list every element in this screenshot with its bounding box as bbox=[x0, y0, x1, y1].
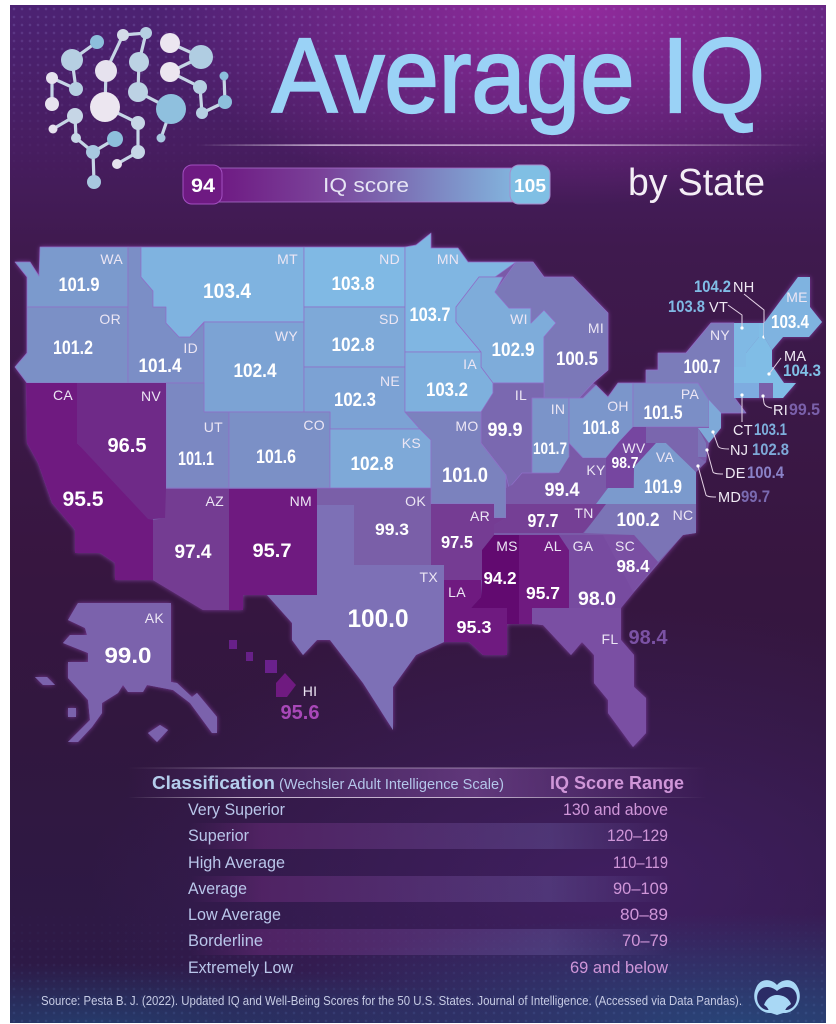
state: Connecticut with callout: CT bbox=[733, 423, 753, 439]
state: Virginia: 101.9 bbox=[644, 477, 682, 498]
state: Indiana: IN bbox=[551, 401, 565, 417]
state: North Dakota: 103.8 bbox=[332, 274, 374, 295]
state: Maine bbox=[764, 277, 822, 350]
state: Nevada: NV bbox=[141, 388, 161, 404]
state: Arizona bbox=[153, 489, 229, 610]
table header bbox=[128, 768, 707, 798]
state: Mississippi bbox=[471, 535, 519, 624]
state: Oregon: 101.2 bbox=[53, 338, 93, 359]
state: South Dakota: 102.8 bbox=[332, 335, 374, 356]
state: Hawaii bbox=[229, 640, 320, 724]
state: Ohio: OH bbox=[607, 398, 629, 414]
row: Superior bbox=[188, 827, 668, 845]
state: New Mexico: NM bbox=[290, 493, 312, 509]
icon: molecular brain logo bbox=[45, 27, 232, 189]
row: Very Superior: 130 and above bbox=[563, 801, 668, 819]
state: Florida: FL bbox=[602, 631, 618, 647]
state: Nebraska: NE bbox=[380, 373, 400, 389]
legend minimum box: 94 bbox=[191, 176, 215, 197]
legend label: IQ score bbox=[323, 175, 409, 197]
state: New Jersey with callout bbox=[698, 400, 789, 459]
state: Missouri bbox=[405, 412, 506, 518]
state: Kentucky: KY bbox=[586, 462, 606, 478]
state: Nevada bbox=[77, 383, 166, 520]
state: Tennessee: TN bbox=[574, 505, 594, 521]
state: Indiana: 101.7 bbox=[533, 439, 567, 458]
state: Minnesota: 103.7 bbox=[410, 305, 450, 326]
state: Maryland with callout bbox=[646, 428, 770, 506]
state: Louisiana: 95.3 bbox=[456, 617, 492, 637]
state: Florida bbox=[532, 608, 668, 747]
state: Utah bbox=[166, 383, 229, 488]
state: California bbox=[26, 383, 153, 580]
state: Montana: MT bbox=[277, 251, 298, 267]
state: Massachusetts with callout bbox=[734, 349, 821, 398]
state: Alabama: 95.7 bbox=[526, 583, 560, 603]
state: Washington: 101.9 bbox=[58, 275, 100, 296]
state: Kansas bbox=[330, 429, 431, 488]
state: New Jersey with callout: 102.8 bbox=[752, 440, 789, 459]
state: Idaho bbox=[128, 247, 204, 383]
row: Extremely Low: Extremely Low bbox=[188, 959, 293, 977]
state: Tennessee bbox=[493, 504, 608, 533]
state: North Dakota bbox=[304, 247, 405, 307]
row: Borderline bbox=[188, 932, 668, 950]
state: Delaware with callout: 100.4 bbox=[747, 463, 784, 482]
legend minimum box bbox=[183, 165, 222, 204]
state: Arizona: AZ bbox=[206, 493, 224, 509]
state: Idaho: ID bbox=[183, 340, 198, 356]
state: Massachusetts with callout: 104.3 bbox=[783, 361, 821, 380]
row: Average bbox=[188, 880, 668, 898]
state: Missouri: MO bbox=[455, 418, 479, 434]
state: Massachusetts with callout: MA bbox=[784, 349, 806, 365]
row: Borderline: Borderline bbox=[188, 932, 263, 950]
state: Maine: ME bbox=[786, 289, 808, 305]
row: Low Average: 80–89 bbox=[620, 906, 668, 924]
state: Ohio: 101.8 bbox=[582, 418, 620, 439]
state: New York bbox=[646, 323, 746, 413]
state: Texas bbox=[267, 505, 444, 730]
state: Hawaii: HI bbox=[303, 683, 317, 699]
state: South Dakota bbox=[304, 307, 405, 367]
state: Pennsylvania: 101.5 bbox=[644, 403, 683, 424]
state: Virginia bbox=[596, 443, 696, 504]
row: Very Superior bbox=[188, 801, 668, 819]
state: Minnesota bbox=[405, 233, 516, 352]
state: Oklahoma: OK bbox=[405, 493, 426, 509]
state: Wyoming bbox=[204, 322, 304, 412]
state: Wisconsin: WI bbox=[510, 311, 528, 327]
choropleth map of US states bbox=[15, 233, 822, 747]
state: Arkansas: 97.5 bbox=[441, 532, 473, 552]
state: Kansas: KS bbox=[402, 435, 421, 451]
state: Maine: 103.4 bbox=[771, 312, 809, 332]
state: Florida: 98.4 bbox=[628, 627, 668, 649]
state: Missouri: 101.0 bbox=[442, 464, 488, 487]
state: Kentucky: 99.4 bbox=[544, 480, 580, 501]
state: Arkansas bbox=[431, 504, 506, 580]
state: Wisconsin bbox=[456, 277, 556, 383]
state: Illinois bbox=[481, 383, 544, 488]
state: Vermont with callout: 103.8 bbox=[668, 297, 705, 316]
state: Alabama: AL bbox=[544, 538, 562, 554]
state: South Carolina bbox=[603, 535, 658, 592]
state: Oregon: OR bbox=[99, 311, 121, 327]
state: South Carolina: 98.4 bbox=[616, 556, 650, 576]
state: Kentucky bbox=[506, 457, 608, 504]
state: New Hampshire with callout: NH bbox=[733, 280, 755, 296]
state: Michigan: 100.5 bbox=[556, 349, 598, 370]
state: Alabama bbox=[519, 535, 569, 624]
state: Tennessee: 97.7 bbox=[528, 511, 558, 531]
state: Nebraska: 102.3 bbox=[334, 390, 376, 411]
table header: (Wechsler Adult Intelligence Scale) bbox=[279, 777, 504, 793]
state: Wyoming: WY bbox=[275, 328, 298, 344]
state: Alaska: AK bbox=[145, 610, 164, 626]
state: Nebraska bbox=[304, 367, 420, 429]
row: Extremely Low: 69 and below bbox=[570, 959, 668, 977]
state: Georgia: GA bbox=[573, 538, 594, 554]
state: Indiana bbox=[532, 398, 569, 473]
state: Virginia: VA bbox=[656, 449, 674, 465]
state: West Virginia: 98.7 bbox=[612, 455, 638, 472]
state: Utah: UT bbox=[204, 419, 223, 435]
state: Oregon bbox=[15, 307, 128, 383]
state: Utah: 101.1 bbox=[178, 449, 214, 470]
row: Superior: 120–129 bbox=[607, 827, 668, 845]
state: Montana: 103.4 bbox=[203, 280, 251, 303]
state: Rhode Island with callout: 99.5 bbox=[789, 400, 820, 419]
row: Average: Average bbox=[188, 880, 247, 898]
state: Rhode Island with callout bbox=[759, 383, 820, 419]
state: Colorado bbox=[229, 412, 330, 488]
state: Wyoming: 102.4 bbox=[234, 361, 277, 382]
state: Minnesota: MN bbox=[437, 251, 459, 267]
title: Average IQ bbox=[272, 17, 765, 135]
state: Nevada: 96.5 bbox=[108, 435, 146, 457]
state: Michigan: MI bbox=[588, 320, 604, 336]
state: North Carolina: 100.2 bbox=[616, 510, 660, 531]
state: Georgia: 98.0 bbox=[578, 589, 616, 610]
state: Illinois: 99.9 bbox=[488, 420, 522, 441]
state: North Dakota: ND bbox=[379, 251, 400, 267]
icon: publisher logo bbox=[754, 980, 800, 1015]
state: Alaska bbox=[35, 603, 217, 742]
state: West Virginia: WV bbox=[622, 440, 646, 456]
state: South Dakota: SD bbox=[379, 311, 399, 327]
state: Arizona: 97.4 bbox=[174, 542, 212, 563]
state: Alaska: 99.0 bbox=[104, 643, 152, 668]
state: West Virginia bbox=[606, 427, 656, 488]
state: Iowa bbox=[405, 352, 493, 412]
state: Washington bbox=[15, 247, 128, 307]
state: New Hampshire with callout bbox=[694, 277, 772, 367]
state: Ohio bbox=[569, 383, 633, 458]
state: Colorado: 101.6 bbox=[256, 447, 296, 468]
state: North Carolina: NC bbox=[673, 507, 693, 523]
state: Wisconsin: 102.9 bbox=[492, 340, 534, 361]
state: Delaware with callout bbox=[698, 428, 784, 482]
state: Connecticut with callout bbox=[733, 383, 787, 439]
state: Pennsylvania bbox=[633, 383, 709, 427]
row: Very Superior: Very Superior bbox=[188, 801, 285, 819]
state: Connecticut with callout: 103.1 bbox=[754, 420, 787, 439]
state: Illinois: IL bbox=[515, 387, 527, 403]
subtitle: by State bbox=[628, 162, 765, 204]
state: Georgia bbox=[559, 535, 634, 610]
row: Low Average: Low Average bbox=[188, 906, 281, 924]
row: Average: 90–109 bbox=[613, 880, 668, 898]
state: Vermont with callout: VT bbox=[709, 300, 728, 316]
state: Oklahoma bbox=[317, 489, 431, 565]
state: Mississippi: MS bbox=[496, 538, 518, 554]
state: Iowa: IA bbox=[463, 356, 477, 372]
state: New Mexico: 95.7 bbox=[252, 541, 292, 562]
state: Oklahoma: 99.3 bbox=[375, 520, 409, 539]
legend maximum box bbox=[510, 165, 550, 204]
state: Pennsylvania: PA bbox=[681, 386, 699, 402]
state: New Mexico bbox=[229, 489, 317, 610]
state: Iowa: 103.2 bbox=[426, 380, 468, 401]
state: New Hampshire with callout: 104.2 bbox=[694, 277, 731, 296]
state: Maryland with callout: MD bbox=[718, 490, 741, 506]
state: Kansas: 102.8 bbox=[350, 454, 394, 475]
state: New York: 100.7 bbox=[684, 357, 720, 378]
table header: IQ Score Range bbox=[550, 773, 684, 793]
state: Maryland with callout: 99.7 bbox=[741, 487, 770, 506]
state: Louisiana bbox=[444, 580, 507, 655]
state: Texas: 100.0 bbox=[348, 605, 408, 633]
state: Texas: TX bbox=[420, 569, 438, 585]
row: Extremely Low bbox=[188, 959, 668, 977]
row: High Average bbox=[188, 854, 668, 872]
state: North Carolina bbox=[584, 504, 696, 562]
state: Arkansas: AR bbox=[470, 508, 490, 524]
state: Delaware with callout: DE bbox=[725, 466, 746, 482]
state: Michigan bbox=[495, 262, 608, 398]
row: High Average: High Average bbox=[188, 854, 285, 872]
state: Louisiana: LA bbox=[448, 584, 466, 600]
row: High Average: 110–119 bbox=[613, 854, 668, 872]
row: Borderline: 70–79 bbox=[622, 932, 668, 950]
legend: IQ score colour scale bbox=[183, 165, 550, 204]
state: Hawaii: 95.6 bbox=[280, 702, 320, 724]
state: New York: NY bbox=[710, 327, 730, 343]
state: New Jersey with callout: NJ bbox=[730, 443, 748, 459]
row: Superior: Superior bbox=[188, 827, 249, 845]
row: Low Average bbox=[188, 906, 668, 924]
state: Washington: WA bbox=[100, 251, 123, 267]
classification table bbox=[128, 768, 707, 977]
state: South Carolina: SC bbox=[615, 538, 635, 554]
table header: Classification bbox=[152, 773, 275, 793]
state: California: CA bbox=[53, 387, 73, 403]
state: California: 95.5 bbox=[62, 488, 104, 511]
state: Montana bbox=[141, 247, 304, 337]
state: Colorado: CO bbox=[303, 417, 325, 433]
state: Idaho: 101.4 bbox=[138, 356, 182, 377]
state: Vermont with callout bbox=[668, 297, 759, 367]
source note: Source: Pesta B. J. (2022). Updated IQ and Well-Being Scores for the 50 U.S. States. Journal of Intelligence. (Accessed via Data Pandas). bbox=[41, 994, 742, 1008]
state: Mississippi: 94.2 bbox=[484, 568, 517, 588]
legend maximum box: 105 bbox=[514, 176, 546, 196]
state: Rhode Island with callout: RI bbox=[773, 403, 788, 419]
